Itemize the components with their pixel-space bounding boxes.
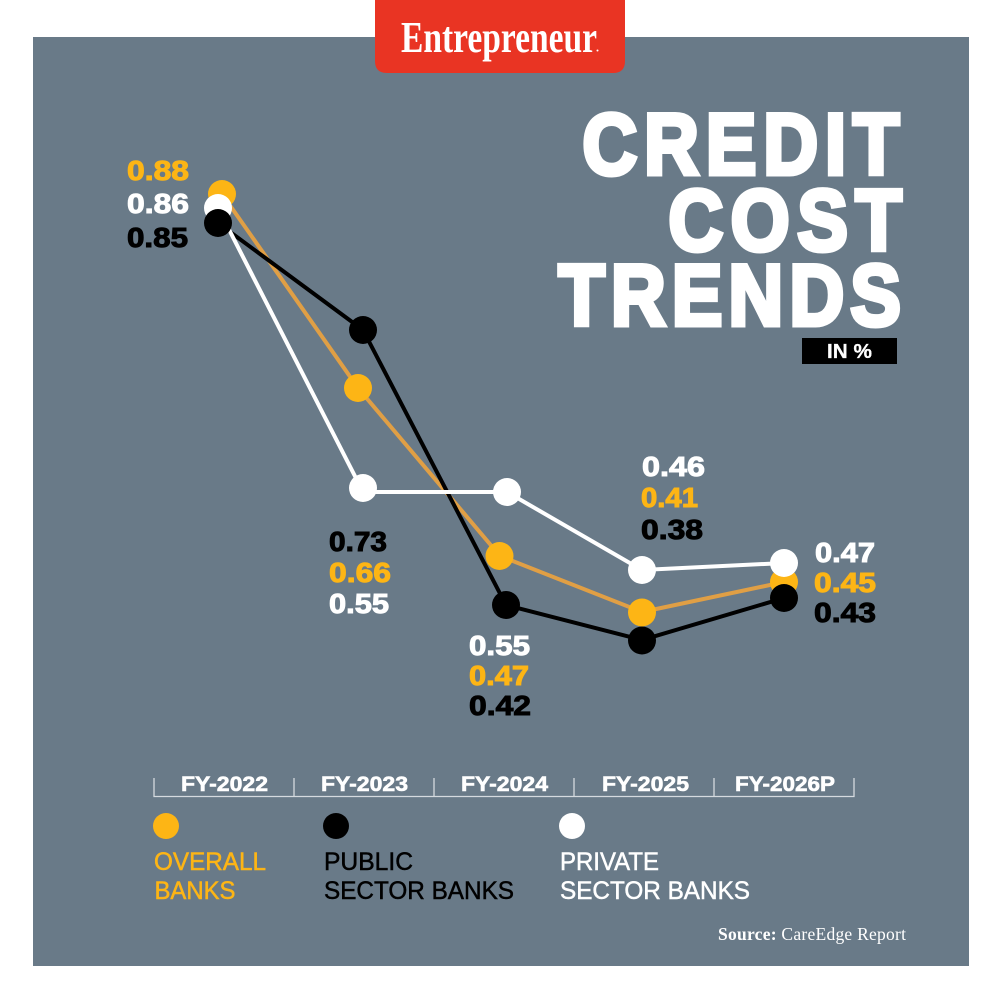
markers: private sector banks [204, 194, 798, 584]
value labels: FY-2025: 0.38 [641, 514, 703, 545]
legend: private sector banks: SECTOR BANKS [560, 877, 750, 905]
unit badge: in % [802, 338, 897, 364]
value labels: FY-2026P: 0.47 [815, 537, 875, 568]
value labels: FY-2023: 0.66 [329, 557, 391, 588]
x axis [154, 773, 854, 796]
value labels: FY-2026P: 0.45 [814, 567, 876, 598]
source note: Source: CareEdge Report [718, 924, 906, 944]
x axis: FY-2026P [735, 773, 835, 796]
markers: overall banks [208, 180, 798, 626]
legend: public sector banks: PUBLIC [324, 848, 413, 876]
masthead: Entrepreneur logo: Entrepreneur [401, 13, 597, 62]
value labels: FY-2024 [469, 630, 531, 721]
title [558, 98, 902, 344]
value labels: FY-2024: 0.47 [469, 660, 529, 691]
title: COST [668, 174, 902, 269]
value labels: FY-2022 [127, 155, 189, 253]
value labels: FY-2022: 0.86 [127, 188, 189, 219]
x axis: FY-2024 [461, 773, 548, 796]
legend: private sector banks [559, 813, 750, 905]
x axis: FY-2025 [602, 773, 689, 796]
value labels: FY-2025: 0.41 [641, 482, 698, 513]
unit badge: in %: IN % [827, 341, 872, 363]
markers: public sector banks [204, 209, 798, 654]
legend: public sector banks: SECTOR BANKS [324, 877, 514, 905]
value labels: FY-2025: 0.46 [642, 451, 705, 482]
value labels: FY-2024: 0.55 [469, 630, 530, 661]
value labels: FY-2024: 0.42 [469, 690, 531, 721]
legend: overall banks: BANKS [154, 877, 236, 905]
line chart [204, 180, 798, 654]
masthead: Entrepreneur logo [375, 0, 625, 73]
value labels: FY-2026P: 0.43 [814, 597, 876, 628]
x axis: FY-2023 [321, 773, 408, 796]
legend: overall banks: OVERALL [154, 848, 266, 876]
legend: overall banks [153, 813, 266, 905]
value labels: FY-2026P [814, 537, 876, 628]
value labels: FY-2023: 0.55 [329, 588, 389, 619]
title: TRENDS [558, 249, 901, 344]
value labels: FY-2023 [329, 526, 391, 619]
line: private sector banks [218, 208, 784, 570]
legend: public sector banks [323, 813, 514, 905]
legend: private sector banks: PRIVATE [560, 848, 659, 876]
line: overall banks [222, 194, 784, 612]
title: CREDIT [582, 98, 899, 193]
value labels: FY-2023: 0.73 [329, 526, 387, 557]
line: public sector banks [218, 223, 784, 640]
value labels: FY-2022: 0.85 [127, 222, 188, 253]
value labels: FY-2022: 0.88 [127, 155, 189, 186]
value labels: FY-2025 [641, 451, 705, 545]
x axis: FY-2022 [181, 773, 268, 796]
